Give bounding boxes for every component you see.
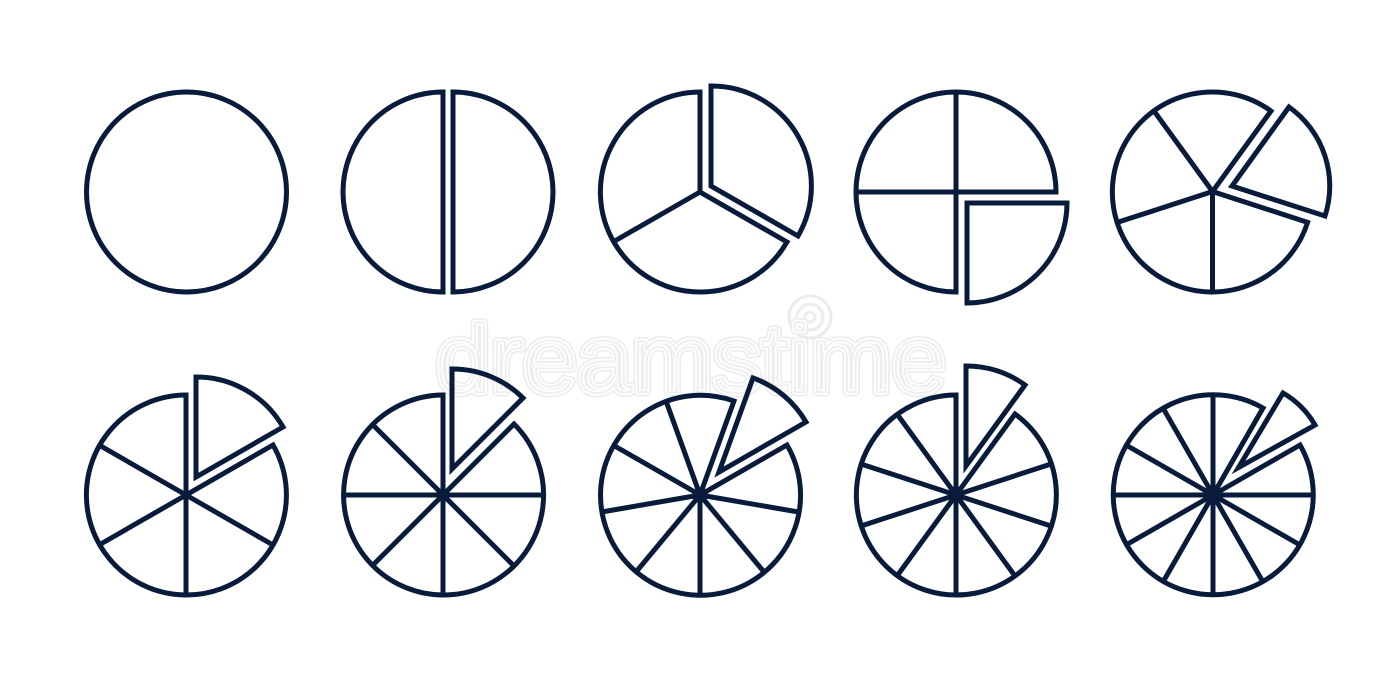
- pie: twelfths: [1113, 393, 1315, 595]
- pie: sixths: [86, 377, 286, 595]
- pie: eighths: [343, 369, 544, 595]
- pie: halves: [343, 92, 553, 292]
- pie: fifths: [1112, 92, 1330, 292]
- watermark: dreamstime: [436, 306, 946, 413]
- pie: ninths: [601, 378, 806, 595]
- pie: thirds: [600, 86, 811, 292]
- watermark: dreamstime: [436, 306, 946, 413]
- watermark: dreamstime: [436, 306, 946, 413]
- pie: tenths: [856, 366, 1056, 595]
- pie: whole circle: [86, 92, 286, 292]
- pie: quarters: [856, 92, 1067, 303]
